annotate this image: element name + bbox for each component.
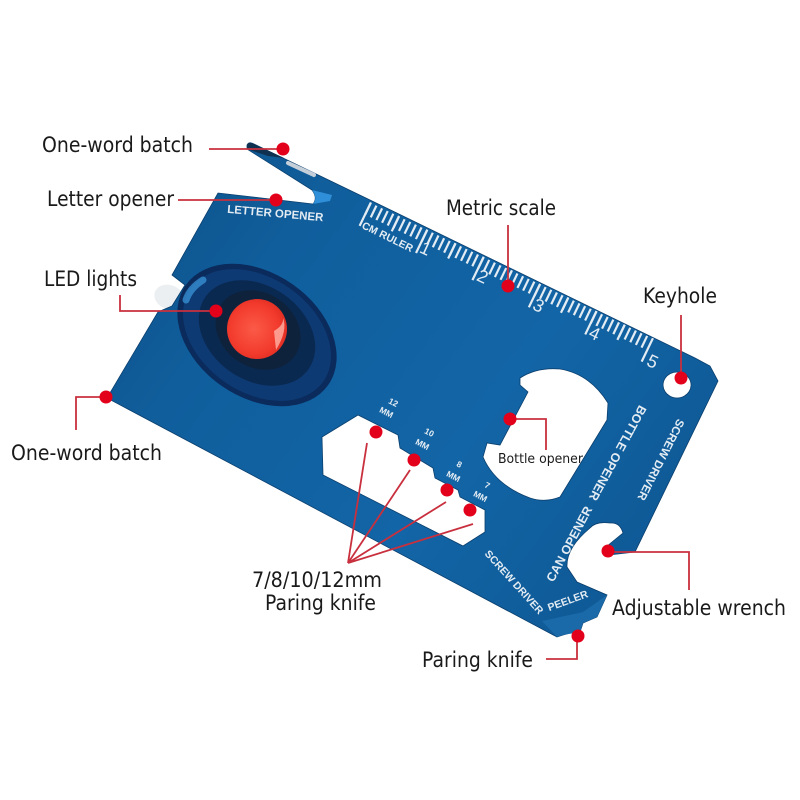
engraved text: 8 [455, 459, 464, 470]
engraved text: PEELER [546, 588, 590, 614]
callout: bottle opener: Bottle opener [498, 452, 584, 467]
callout: letter opener [47, 187, 282, 211]
engraved text: 12 [387, 396, 400, 409]
ruler numbers [417, 237, 661, 373]
engraved text: CAN OPENER [544, 504, 595, 584]
icon: LED bulb [151, 281, 187, 313]
callout: keyhole: Keyhole [643, 284, 717, 308]
callout: wrench sizes paring knife [252, 426, 476, 615]
engraved text: MM [378, 405, 395, 420]
ruler numbers: 5 [644, 350, 661, 373]
ruler numbers: 3 [530, 294, 547, 317]
callout: adjustable wrench: Adjustable wrench [612, 596, 786, 620]
callout: one-word batch top: One-word batch [42, 133, 193, 157]
blade tip highlight [312, 190, 332, 204]
callout: one-word batch left [11, 390, 162, 465]
engraved text: LETTER OPENER [227, 204, 325, 224]
engraved text: MM [472, 489, 489, 504]
blade tip dark edge [247, 143, 284, 158]
ruler numbers: 4 [586, 322, 603, 345]
callout: adjustable wrench [602, 544, 786, 620]
engraved text: MM [414, 437, 431, 452]
callout: metric scale [446, 196, 556, 292]
callout: one-word batch top [42, 133, 290, 157]
callout: letter opener: Letter opener [47, 187, 174, 211]
callout: bottle opener [498, 412, 584, 467]
engraved text: 10 [423, 426, 436, 439]
bottom chamfer [542, 595, 607, 637]
engraved text: SCREW DRIVER [482, 548, 546, 617]
ruler markings [359, 202, 653, 362]
callout: LED lights: LED lights [44, 267, 137, 291]
engraved text [227, 204, 686, 617]
callout: LED lights [44, 267, 222, 318]
ruler numbers: 1 [417, 237, 434, 260]
LED light unit [150, 234, 364, 436]
callout: paring knife bottom: Paring knife [422, 648, 533, 672]
callout: one-word batch left: One-word batch [11, 441, 162, 465]
engraved text: CM RULER [360, 220, 415, 255]
housing highlight [186, 280, 203, 300]
engraved text: BOTTLE OPENER [586, 403, 649, 503]
callout: paring knife bottom [422, 630, 584, 672]
ruler numbers: 2 [474, 265, 491, 288]
blade slot [288, 163, 314, 175]
engraved text: MM [445, 469, 462, 484]
LED housing [150, 234, 364, 436]
callout: wrench sizes paring knife: Paring knife [265, 591, 376, 615]
red button [227, 299, 287, 359]
callout: metric scale: Metric scale [446, 196, 556, 220]
engraved text: 7 [483, 480, 492, 491]
card body [107, 143, 718, 637]
callout: wrench sizes paring knife: 7/8/10/12mm [252, 568, 382, 592]
engraved text: SCREW DRIVER [634, 417, 686, 503]
callout: keyhole [643, 284, 717, 384]
multi-tool card [107, 143, 718, 637]
